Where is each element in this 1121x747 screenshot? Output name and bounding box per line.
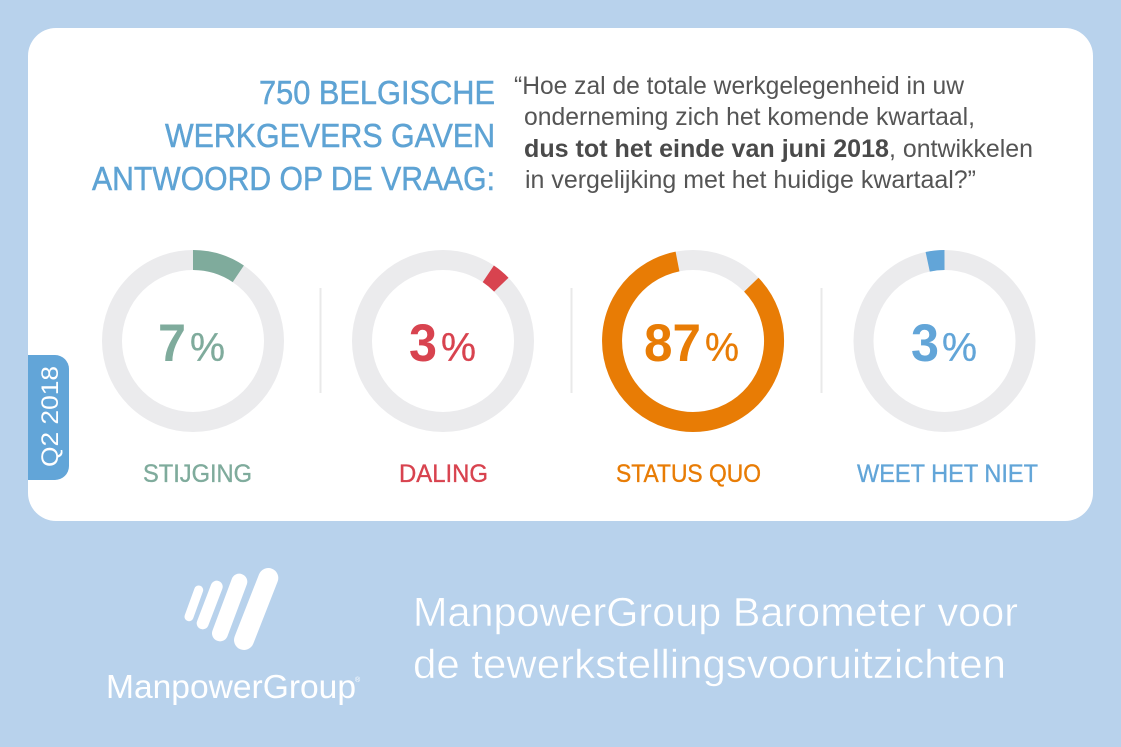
title: barometer: de tewerkstellingsvooruitzichten bbox=[413, 641, 1006, 687]
donut: daling 3% bbox=[362, 260, 524, 488]
donut: stijging 7%: % bbox=[190, 326, 225, 370]
heading: 750 employers bbox=[92, 74, 495, 197]
donut: daling 3%: 3 bbox=[409, 314, 437, 373]
text: survey question: “Hoe zal de totale werkgelegenheid in uw bbox=[514, 72, 965, 100]
heading: 750 employers: WERKGEVERS GAVEN bbox=[165, 117, 495, 154]
tab: quarter label: Q2 2018 bbox=[37, 366, 64, 467]
text: survey question: dus tot het einde van juni 2018 bbox=[524, 135, 889, 163]
donut: weet het niet 3%: WEET HET NIET bbox=[857, 460, 1038, 488]
title: barometer: ManpowerGroup Barometer voor bbox=[413, 589, 1018, 635]
tab: quarter label bbox=[28, 355, 69, 480]
text: survey question: in vergelijking met het huidige kwartaal?” bbox=[525, 166, 976, 194]
logo wordmark: ManpowerGroup bbox=[106, 668, 356, 705]
heading: 750 employers: 750 BELGISCHE bbox=[259, 74, 495, 111]
donut: stijging 7% bbox=[112, 260, 274, 488]
icon: logo bars bbox=[189, 578, 268, 640]
text: survey question: onderneming zich het komende kwartaal, bbox=[524, 103, 975, 131]
title: barometer bbox=[413, 589, 1018, 687]
donut: status quo 87%: STATUS QUO bbox=[616, 460, 761, 488]
donut: weet het niet 3%: 3 bbox=[911, 314, 939, 373]
donut: stijging 7%: 7 bbox=[158, 314, 186, 373]
text: survey question: , ontwikkelen bbox=[889, 135, 1033, 163]
donut: weet het niet 3%: % bbox=[942, 326, 977, 370]
heading: 750 employers: ANTWOORD OP DE VRAAG: bbox=[92, 160, 495, 197]
donut: status quo 87%: % bbox=[705, 326, 739, 370]
panel background bbox=[28, 28, 1093, 521]
panel: survey results bbox=[28, 28, 1093, 521]
registered mark: ® bbox=[355, 676, 361, 684]
text: survey question bbox=[514, 72, 1033, 194]
donut: status quo 87% bbox=[612, 260, 774, 488]
donut: daling 3%: % bbox=[441, 326, 476, 370]
donut: weet het niet 3% bbox=[857, 260, 1038, 488]
donut: daling 3%: DALING bbox=[399, 460, 488, 488]
donut: stijging 7%: STIJGING bbox=[143, 460, 252, 488]
donut: status quo 87%: 87 bbox=[644, 314, 701, 373]
logo: ManpowerGroup bbox=[106, 578, 361, 705]
